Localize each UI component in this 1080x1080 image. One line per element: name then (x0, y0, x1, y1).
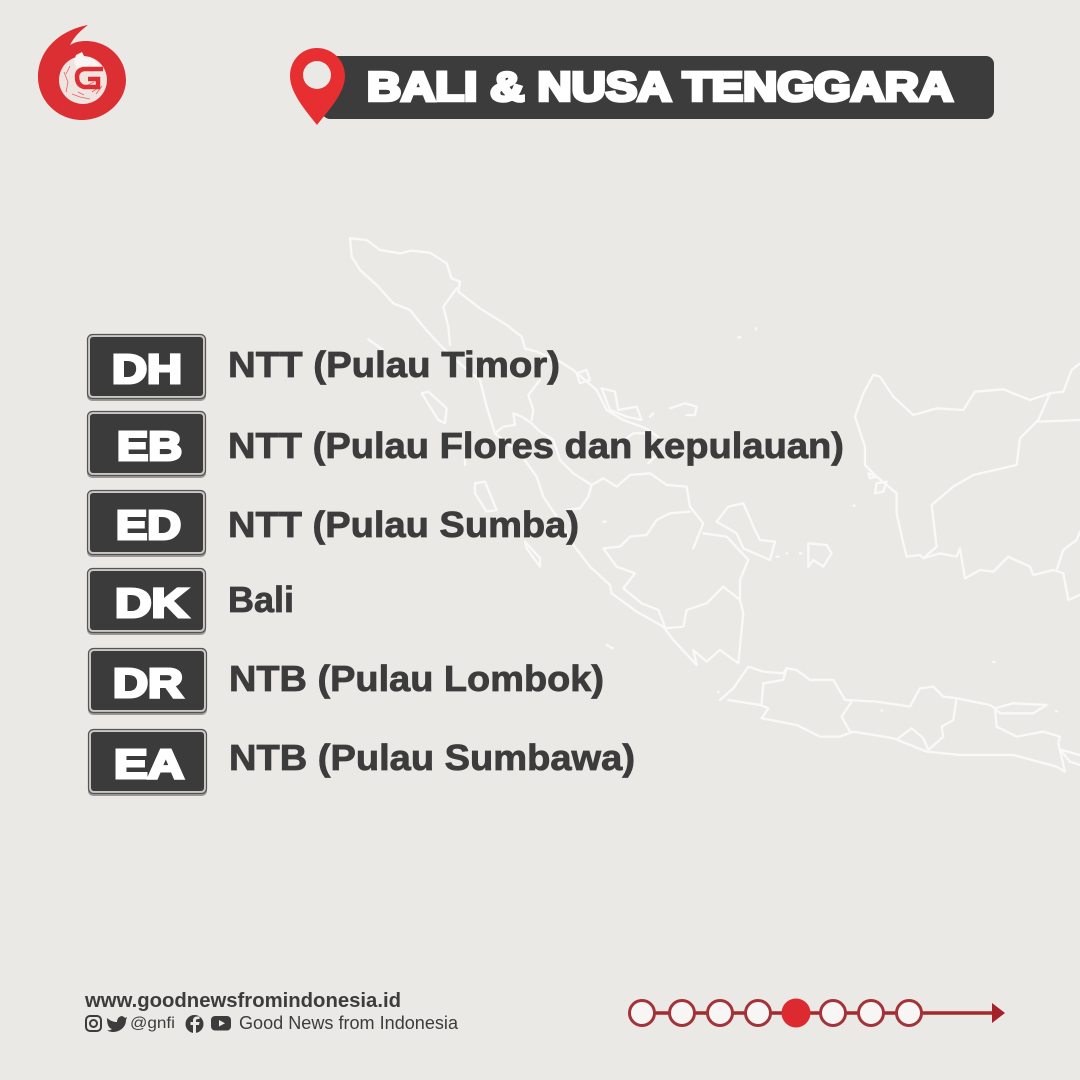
badge: ED: ED (116, 502, 181, 548)
website url: www.goodnewsfromindonesia.id (84, 990, 401, 1012)
arrow head (992, 1003, 1005, 1023)
icon: instagram (86, 1016, 101, 1031)
logo: letter G (77, 69, 103, 87)
row: DK (87, 568, 294, 635)
logo: medallion pattern (64, 66, 102, 99)
progress stepper (630, 998, 1005, 1028)
map: western Indonesia outline (350, 238, 1080, 772)
icon: twitter (107, 1016, 127, 1032)
label: EA: NTB (Pulau Sumbawa) (229, 737, 635, 778)
row: EA (88, 730, 635, 796)
badge: DK (87, 568, 206, 635)
row: DH (87, 334, 560, 401)
icon: location pin (290, 48, 345, 125)
badge: ED (87, 490, 206, 557)
handle: @gnfi (130, 1015, 175, 1032)
label: ED: NTT (Pulau Sumba) (228, 504, 579, 545)
arrow line (642, 1011, 994, 1015)
label: EB: NTT (Pulau Flores dan kepulauan) (228, 425, 844, 466)
row: ED (87, 490, 579, 557)
label: DK: Bali (228, 579, 294, 620)
list of plate codes (87, 334, 844, 796)
label: DH: NTT (Pulau Timor) (228, 344, 560, 385)
logo (38, 25, 126, 120)
logo: white medallion (59, 56, 107, 104)
footer: website and social (84, 990, 459, 1033)
logo: eagle head (74, 52, 103, 70)
title bar background (322, 56, 994, 119)
badge: EA: EA (114, 741, 184, 787)
badge: DR: DR (113, 660, 183, 706)
step dots (630, 998, 922, 1028)
badge: DH (87, 334, 206, 401)
title text: BALI & NUSA TENGGARA (367, 64, 953, 110)
badge: DK: DK (115, 580, 188, 626)
badge: EB: EB (117, 423, 182, 469)
logo: red swirl (38, 25, 126, 120)
row: DR (88, 648, 604, 715)
badge: DH: DH (112, 346, 182, 392)
icon: youtube (211, 1016, 231, 1030)
badge: EB (87, 412, 206, 478)
map: Sumatra (350, 238, 775, 665)
brand name: Good News from Indonesia (239, 1013, 459, 1033)
badge: EA (88, 730, 207, 796)
icon: facebook (186, 1015, 204, 1033)
row: EB (87, 412, 844, 478)
label: DR: NTB (Pulau Lombok) (229, 658, 604, 699)
title bar (290, 48, 994, 125)
badge: DR (88, 648, 207, 715)
map: Kalimantan and Java (718, 363, 1080, 772)
